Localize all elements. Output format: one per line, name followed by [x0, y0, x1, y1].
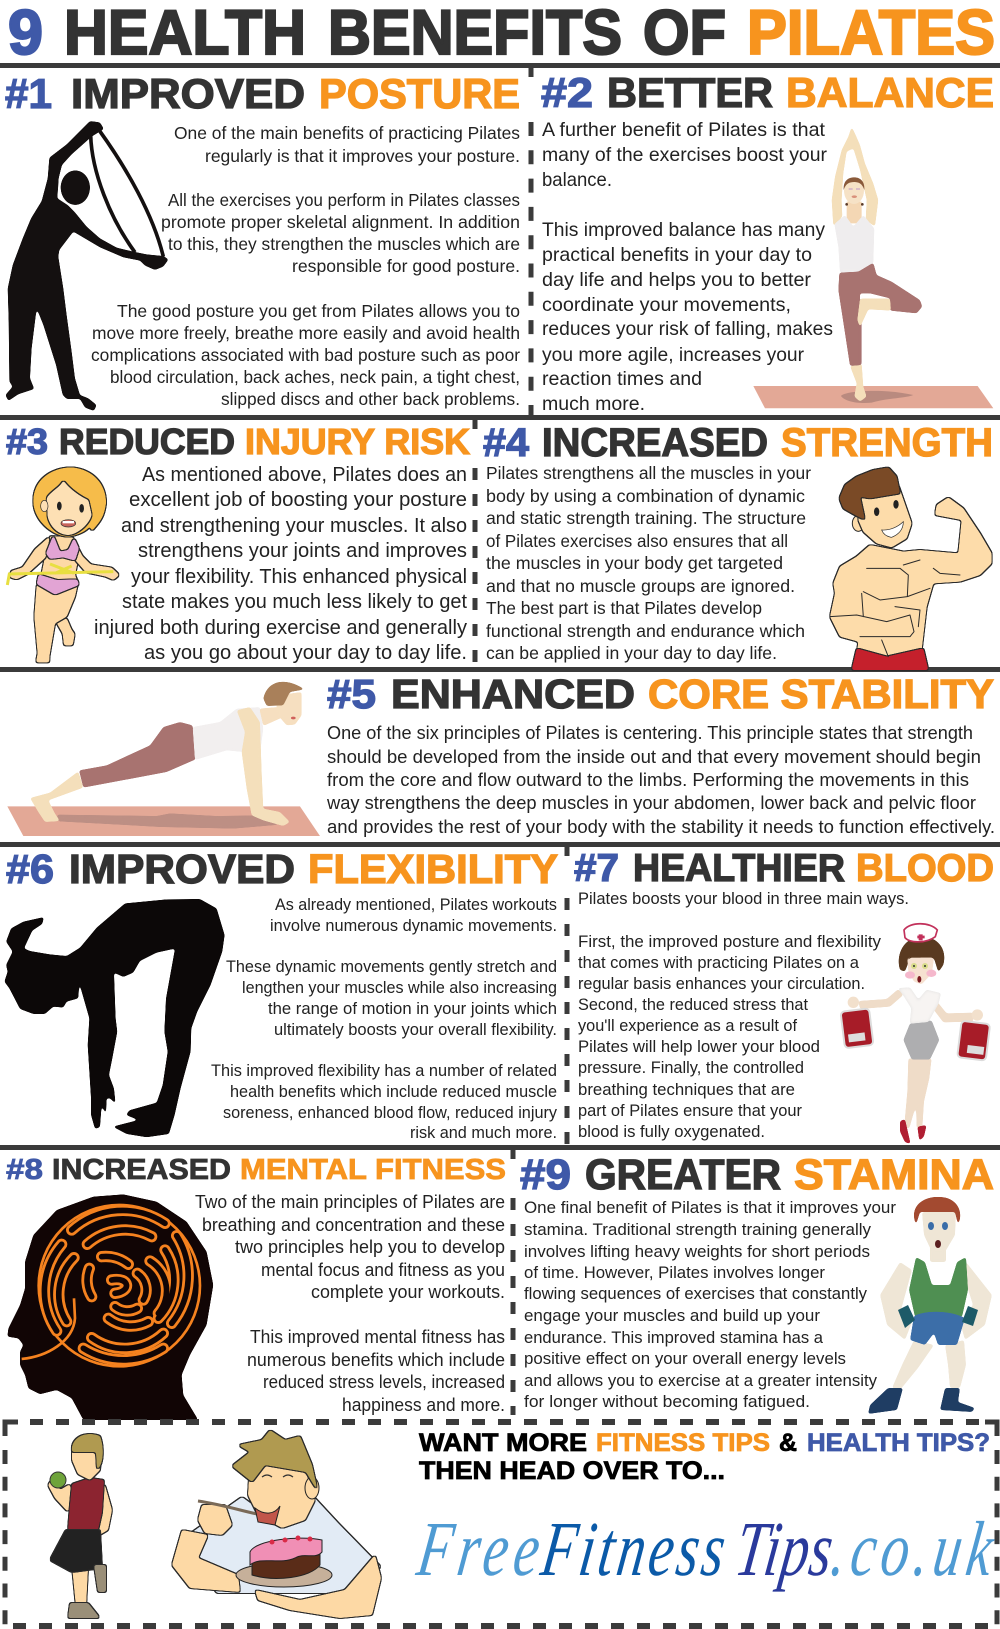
text block: blood: First, the improved posture and flexibility — [578, 933, 882, 951]
text block: flexibility: ultimately boosts your overall flexibility. — [274, 1021, 557, 1039]
heading: increased mental fitness — [6, 1154, 506, 1186]
text block: posture: move more freely, breathe more easily and avoid health — [92, 323, 520, 343]
text block: injury risk — [94, 464, 467, 664]
text block: blood: blood is fully oxygenated. — [578, 1123, 765, 1141]
text block: posture: responsible for good posture. — [292, 256, 520, 276]
icon: nurse holding blood bags — [841, 924, 990, 1144]
text block: flexibility: risk and much more. — [410, 1124, 557, 1142]
panel: #4 increased strength — [483, 421, 993, 670]
heading: healthier blood — [574, 847, 994, 890]
icon: plank on mat — [7, 682, 320, 836]
text block: core stability: One of the six principles of Pilates is centering. This principle states that strength — [327, 722, 973, 743]
heading: enhanced core stability: ENHANCED — [391, 671, 635, 717]
heading: healthier blood: #7 — [574, 847, 619, 890]
logo: FreeFitnessTips.co.uk: Fitness — [536, 1505, 731, 1592]
text block: balance: much more. — [542, 393, 645, 415]
text block: posture: All the exercises you perform in Pilates classes — [168, 190, 520, 210]
text block: balance: This improved balance has many — [542, 219, 825, 241]
panel: call to action box — [5, 1422, 1000, 1626]
heading: improved flexibility — [6, 846, 558, 892]
logo: FreeFitnessTips.co.uk: Tips — [731, 1505, 839, 1592]
text block: flexibility: This improved flexibility has a number of related — [211, 1062, 557, 1080]
heading: want more tips: & — [779, 1429, 797, 1457]
text block: injury risk: as you go about your day to day life. — [144, 642, 467, 664]
heading: better balance — [541, 69, 994, 116]
title: OF — [643, 0, 726, 68]
panel: #2 better balance — [541, 69, 994, 415]
text block: balance: you more agile, increases your — [542, 344, 804, 366]
heading: increased strength: INCREASED — [542, 421, 768, 465]
heading: increased mental fitness: MENTAL FITNESS — [240, 1154, 506, 1186]
text block: mental fitness — [195, 1192, 505, 1415]
heading: increased mental fitness: INCREASED — [52, 1154, 231, 1186]
text block: balance: day life and helps you to better — [542, 269, 812, 291]
text block: blood: you'll experience as a result of — [578, 1017, 797, 1035]
text block: stamina: of time. However, Pilates involves longer — [524, 1263, 825, 1282]
heading: improved posture: IMPROVED — [71, 70, 305, 117]
text block: blood: part of Pilates ensure that your — [578, 1102, 802, 1120]
heading: reduced injury risk: #3 — [6, 421, 48, 462]
text block: flexibility: soreness, enhanced blood flow, reduced injury — [223, 1104, 558, 1122]
text block: balance — [542, 119, 833, 415]
text block: blood: regular basis enhances your circulation. — [578, 975, 865, 993]
panel: #7 healthier blood — [574, 847, 994, 1144]
text block: stamina: endurance. This improved stamina has a — [524, 1328, 824, 1347]
text block: stamina — [524, 1198, 896, 1411]
text block: balance: coordinate your movements, — [542, 294, 791, 316]
text block: strength: The best part is that Pilates develop — [486, 598, 762, 618]
text block: core stability: from the core and flow outward to the limbs. Performing the movements in this — [327, 769, 969, 790]
heading: better balance: BALANCE — [786, 69, 994, 116]
text block: flexibility: As already mentioned, Pilates workouts — [275, 896, 557, 914]
heading: greater stamina: #9 — [520, 1152, 571, 1199]
text block: flexibility: the range of motion in your joints which — [268, 1000, 557, 1018]
text block: flexibility: These dynamic movements gently stretch and — [226, 958, 557, 976]
heading: enhanced core stability: #5 — [327, 671, 376, 717]
text block: stamina: for longer without becoming fatigued. — [524, 1392, 810, 1411]
heading: want more tips: WANT MORE — [419, 1429, 587, 1457]
text block: strength: body by using a combination of dynamic — [486, 486, 805, 506]
text block: strength: can be applied in your day to day life. — [486, 643, 777, 663]
text block: strength: the muscles in your body get targeted — [486, 553, 783, 573]
heading: reduced injury risk — [6, 421, 470, 462]
text block: core stability: way strengthens the deep muscles in your abdomen, lower back and pelvic floor — [326, 792, 976, 813]
panel: #8 increased mental fitness — [6, 1154, 506, 1420]
text block: flexibility: involve numerous dynamic movements. — [270, 917, 557, 935]
logo: FreeFitnessTips.co.uk — [412, 1505, 1000, 1592]
heading: reduced injury risk: REDUCED — [59, 421, 235, 462]
text block: balance: reaction times and — [542, 368, 702, 390]
icon: tree pose on mat — [753, 127, 993, 408]
text block: posture: to this, they strengthen the muscles which are — [168, 234, 520, 254]
heading: increased strength — [483, 421, 993, 465]
panel: #6 improved flexibility — [4, 846, 558, 1142]
text block: balance: A further benefit of Pilates is that — [542, 119, 826, 141]
text block: stamina: flowing sequences of exercises that constantly — [524, 1284, 867, 1303]
text block: mental fitness: This improved mental fitness has — [250, 1327, 505, 1347]
title: BENEFITS — [328, 0, 622, 68]
text block: posture: slipped discs and other back problems. — [221, 389, 520, 409]
title: 9 — [8, 0, 43, 68]
text block: flexibility: lengthen your muscles while also increasing — [242, 979, 557, 997]
panel: #1 improved posture — [5, 70, 520, 411]
text block: flexibility — [211, 896, 558, 1142]
heading: want more tips: HEALTH TIPS? — [807, 1429, 990, 1457]
heading: better balance: #2 — [541, 69, 593, 116]
logo: FreeFitnessTips.co.uk: .co.uk — [827, 1505, 1000, 1592]
text block: mental fitness: complete your workouts. — [311, 1282, 505, 1302]
text block: strength — [486, 463, 811, 663]
text block: stamina: involves lifting heavy weights for short periods — [524, 1242, 870, 1261]
heading: better balance: BETTER — [607, 69, 773, 116]
text block: balance: practical benefits in your day to — [542, 244, 812, 266]
text block: core stability — [326, 722, 995, 837]
text block: stamina: One final benefit of Pilates is that it improves your — [524, 1198, 896, 1217]
heading: want more tips — [419, 1429, 990, 1485]
icon: man eating cake — [172, 1430, 381, 1618]
heading: increased mental fitness: #8 — [6, 1154, 43, 1186]
icon: runner eating apple — [48, 1434, 112, 1618]
text block: injury risk: your flexibility. This enhanced physical — [131, 566, 467, 588]
heading: want more tips: FITNESS TIPS — [596, 1429, 770, 1457]
text block: mental fitness: numerous benefits which include — [247, 1350, 505, 1370]
text block: balance: many of the exercises boost your — [542, 144, 828, 166]
heading: healthier blood: BLOOD — [856, 847, 994, 890]
text block: injury risk: strengthens your joints and improves — [138, 540, 467, 562]
text block: mental fitness: reduced stress levels, increased — [263, 1372, 505, 1392]
heading: increased strength: #4 — [483, 421, 530, 465]
text block: blood: Second, the reduced stress that — [578, 996, 808, 1014]
text block: posture: regularly is that it improves your posture. — [205, 146, 520, 166]
text block: balance: balance. — [542, 169, 612, 191]
text block: posture: complications associated with bad posture such as poor — [91, 345, 520, 365]
text block: posture: promote proper skeletal alignment. In addition — [161, 212, 520, 232]
text block: stamina: engage your muscles and build up your — [524, 1306, 820, 1325]
heading: improved flexibility: #6 — [6, 846, 54, 892]
text block: mental fitness: mental focus and fitness as you — [261, 1260, 505, 1280]
icon: man in green vest — [868, 1197, 992, 1414]
heading: enhanced core stability — [327, 671, 994, 717]
text block: strength: and static strength training. The structure — [486, 508, 806, 528]
text block: injury risk: state makes you much less likely to get — [122, 591, 467, 613]
text block: blood: breathing techniques that are — [578, 1081, 795, 1099]
text block: blood: Pilates will help lower your blood — [578, 1038, 820, 1056]
heading: greater stamina: GREATER — [585, 1152, 781, 1199]
text block: injury risk: As mentioned above, Pilates does an — [142, 464, 467, 486]
heading: greater stamina: STAMINA — [794, 1152, 994, 1199]
heading: want more tips: THEN HEAD OVER TO... — [419, 1457, 725, 1485]
text block: posture: blood circulation, back aches, neck pain, a tight chest, — [110, 367, 520, 387]
text block: mental fitness: happiness and more. — [342, 1395, 505, 1415]
title — [8, 0, 995, 68]
text block: blood: pressure. Finally, the controlled — [578, 1059, 804, 1077]
heading: greater stamina — [520, 1152, 994, 1199]
text block: injury risk: injured both during exercise and generally — [94, 617, 467, 639]
panel: #3 reduced injury risk — [6, 421, 470, 664]
text block: flexibility: health benefits which include reduced muscle — [230, 1083, 557, 1101]
text block: strength: and that no muscle groups are ignored. — [486, 576, 795, 596]
text block: posture: The good posture you get from Pilates allows you to — [117, 301, 520, 321]
icon: head with labyrinth brain — [7, 1194, 213, 1420]
text block: injury risk: excellent job of boosting your posture — [129, 489, 467, 511]
heading: healthier blood: HEALTHIER — [633, 847, 845, 890]
icon: forward bend silhouette — [4, 899, 225, 1137]
logo: FreeFitnessTips.co.uk: Free — [412, 1505, 546, 1592]
heading: increased strength: STRENGTH — [781, 421, 993, 465]
text block: stamina: stamina. Traditional strength training generally — [524, 1220, 871, 1239]
text block: core stability: should be developed from the inside out and that every movement should begin — [327, 746, 981, 767]
heading: reduced injury risk: INJURY RISK — [245, 421, 470, 462]
text block: injury risk: and strengthening your muscles. It also — [121, 515, 467, 537]
text block: mental fitness: two principles help you to develop — [235, 1237, 505, 1257]
title: HEALTH — [64, 0, 306, 68]
text block: stamina: and allows you to exercise at a greater intensity — [524, 1371, 877, 1390]
heading: improved flexibility: FLEXIBILITY — [308, 846, 558, 892]
text block: posture: One of the main benefits of practicing Pilates — [174, 123, 520, 143]
icon: girl with measuring tape — [7, 467, 119, 662]
text block: blood — [578, 890, 909, 1141]
heading: improved posture: POSTURE — [319, 70, 520, 117]
text block: blood: that comes with practicing Pilates on a — [578, 954, 860, 972]
text block: core stability: and provides the rest of your body with the stability it needs to function effectively. — [327, 816, 995, 837]
heading: improved posture: #1 — [5, 70, 52, 117]
heading: enhanced core stability: CORE STABILITY — [648, 671, 994, 717]
text block: balance: reduces your risk of falling, makes — [542, 318, 833, 340]
text block: blood: Pilates boosts your blood in three main ways. — [578, 890, 909, 908]
text block: mental fitness: Two of the main principles of Pilates are — [195, 1192, 505, 1212]
text block: stamina: positive effect on your overall energy levels — [524, 1349, 846, 1368]
text block: mental fitness: breathing and concentration and these — [202, 1215, 505, 1235]
text block: strength: functional strength and endurance which — [486, 621, 805, 641]
heading: improved flexibility: IMPROVED — [69, 846, 295, 892]
icon: silhouette with pilates ring — [5, 121, 169, 411]
icon: muscular man flexing — [830, 467, 992, 670]
heading: improved posture — [5, 70, 520, 117]
panel: #5 enhanced core stability — [7, 671, 995, 837]
text block: strength: of Pilates exercises also ensures that all — [486, 531, 788, 551]
text block: strength: Pilates strengthens all the muscles in your — [486, 463, 811, 483]
panel: #9 greater stamina — [520, 1152, 994, 1414]
text block: posture — [91, 123, 520, 409]
